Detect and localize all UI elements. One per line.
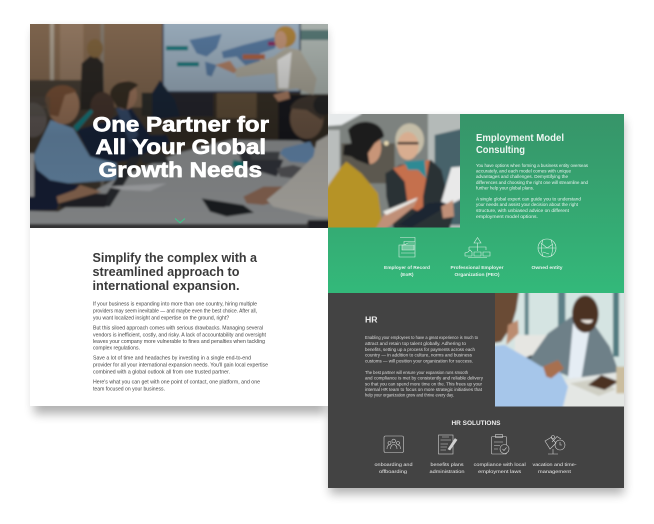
body text: combined with a global outlook all from one trusted partner. (93, 370, 230, 376)
icon: onboarding (384, 436, 404, 452)
labels: HR solutions: management (538, 469, 572, 475)
text: HR description: benefits, setting up a process for payments across each (365, 347, 475, 352)
icon: employer of record folder (399, 238, 415, 257)
heading: employment model consulting: Consulting (476, 144, 525, 156)
hero title (92, 114, 269, 182)
icon: PEO organisation chart (465, 238, 490, 258)
body text: Save a lot of time and headaches by investing in a single end-to-end (93, 356, 251, 362)
icon: compliance (492, 434, 509, 454)
hero title: One Partner for (92, 114, 269, 136)
icon: handshake globe (538, 239, 556, 257)
text: consulting description: your needs and assist your decision about the right (476, 202, 579, 207)
hero title: Growth Needs (98, 159, 262, 182)
text: consulting description: employment model options. (476, 214, 538, 219)
body text: If your business is expanding into more than one country, hiring multiple (93, 302, 257, 308)
panel: employment model consulting (318, 103, 624, 293)
labels: HR solutions: vacation and time- (532, 462, 577, 468)
icon: benefits plans (438, 435, 457, 454)
heading: simplify: streamlined approach to (92, 264, 240, 279)
text: consulting description: differences and choosing the right one will streamline and (476, 180, 588, 185)
body text: you want localized insight and expertise on the ground, right? (93, 316, 229, 322)
body text (93, 302, 268, 392)
photo: two women with tablet (328, 114, 460, 228)
text: HR description: country — in addition to culture, norms and business (365, 353, 473, 358)
older woman (384, 159, 454, 228)
text: consulting description: structure, with unbiased advice on different (476, 208, 570, 213)
labels: HR solutions: benefits plans (430, 462, 464, 468)
page shadows (34, 30, 624, 494)
icon: vacation and time (545, 436, 565, 454)
icon: chevron down (175, 218, 185, 223)
text: HR description: internal HR team to focus on more strategic initiatives that (365, 387, 483, 392)
heading: employment model consulting: Employment Model (476, 132, 564, 144)
foreground person (495, 344, 569, 406)
right man (266, 133, 328, 218)
panel: HR (328, 283, 635, 488)
table (17, 140, 343, 225)
presenter (278, 95, 310, 142)
heading: simplify (92, 250, 258, 293)
text: HR description (365, 335, 484, 398)
body text: But this siloed approach comes with serious drawbacks. Managing several (93, 326, 263, 332)
background woman (80, 53, 104, 110)
screen (161, 24, 301, 94)
body text: vendors is inefficient, costly, and risky. A lack of accountability and oversight (93, 332, 266, 338)
text: consulting description: further help your global plans. (476, 186, 534, 190)
text: consulting description: accurately, and each model comes with unique (476, 168, 571, 174)
labels: HR solutions (374, 462, 577, 475)
labels: employment models: Professional Employer (450, 265, 504, 271)
heading: HR solutions: HR SOLUTIONS (452, 420, 501, 427)
labels: employment models: (EoR) (400, 272, 414, 278)
body text: providers may seem inevitable — and maybe even the best choice. After all, (93, 308, 257, 314)
woman in yellow (328, 160, 382, 228)
heading: employment model consulting (476, 132, 564, 156)
labels: HR solutions: administration (430, 469, 465, 475)
text: HR description: and compliance is met by consistently and reliable delivery (365, 376, 484, 381)
labels: employment models: Employer of Record (384, 265, 430, 271)
text: consulting description: advantages and challenges. Demystifying the (476, 174, 568, 179)
heading: simplify: international expansion. (92, 278, 240, 293)
heading: simplify: Simplify the complex with a (92, 250, 258, 265)
panel: left page (30, 24, 328, 406)
body text: complex regulations. (93, 346, 140, 352)
body text: Here's what you can get with one point of contact, one platform, and one (93, 380, 260, 386)
labels: employment models (384, 265, 563, 278)
photo: handshake (495, 293, 624, 406)
left woman (30, 168, 78, 210)
background man (150, 80, 180, 120)
labels: HR solutions: onboarding and (374, 462, 413, 468)
hero title: All Your Global (96, 136, 266, 159)
body text: provider for all your international expansion needs. You'll gain local expertise (93, 362, 268, 368)
text: HR description: The best partner will ensure your expansion runs smooth (365, 370, 468, 375)
seated men (77, 107, 170, 163)
text: consulting description: You have options when forming a business entity overseas (476, 163, 589, 168)
body text: team focused on your business. (93, 386, 165, 392)
body text: leaves your company more vulnerable to fines and penalties when tackling (93, 339, 265, 345)
hero photo: meeting room (30, 24, 328, 228)
labels: employment models: Organization (PEO) (454, 272, 500, 278)
heading: HR: HR (365, 316, 378, 325)
text: HR description: help your organization grow and thrive every day. (365, 393, 454, 398)
labels: employment models: Owned entity (532, 265, 563, 271)
seated man (528, 317, 621, 382)
text: HR description: customs — will position your organization for success. (365, 358, 473, 364)
text: HR description: so that you can spend more time on the. This frees up your (365, 381, 482, 386)
labels: HR solutions: employment laws (478, 469, 522, 475)
text: consulting description: A single global expert can guide you to understand (476, 196, 581, 202)
text: HR description: attract and retain top talent globally. Adhering to (365, 341, 466, 346)
labels: HR solutions: offboarding (379, 469, 407, 475)
labels: HR solutions: compliance with local (474, 462, 526, 468)
table (563, 371, 624, 406)
text: consulting description (476, 163, 589, 219)
text: HR description: Enabling your employees to have a great experience is much to (365, 335, 478, 340)
